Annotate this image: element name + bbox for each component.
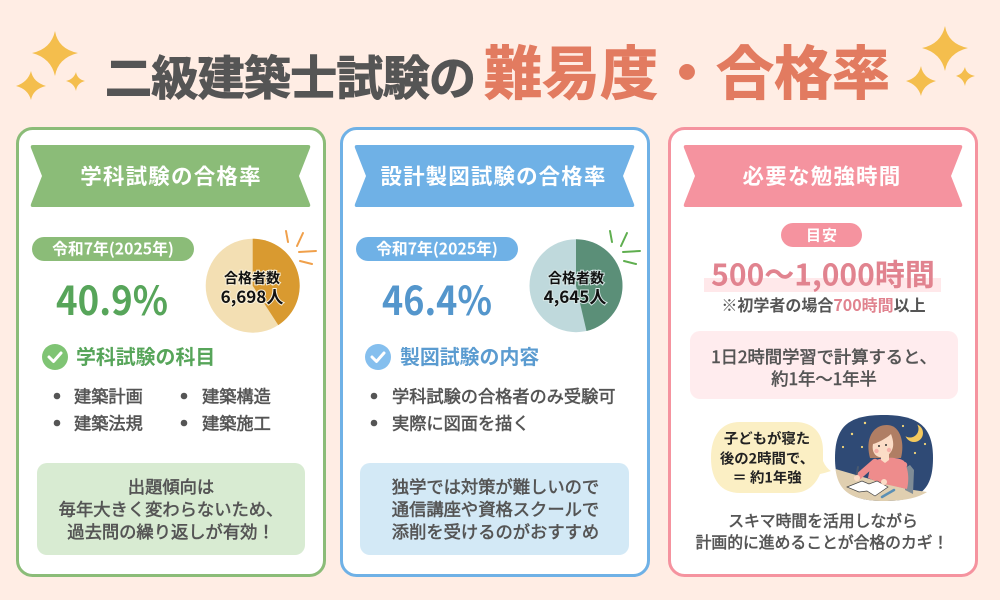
subheading with check: 学科試験の科目	[76, 341, 215, 370]
speech bubble: 子どもが寝た	[724, 428, 810, 448]
note box: 出題傾向は	[128, 473, 214, 498]
note box: 通信講座や資格スクールで	[392, 496, 599, 520]
note box: 添削を受けるのがおすすめ	[392, 518, 599, 543]
icon: sparkles right	[906, 26, 975, 96]
icon: burst lines	[610, 231, 640, 264]
closing message: 計画的に進めることが合格のカギ！	[696, 530, 948, 553]
closing message	[696, 508, 948, 553]
content list: 実際に図面を描く	[392, 410, 530, 434]
pie chart	[530, 239, 623, 332]
guide pill: 目安	[806, 224, 838, 246]
ribbon heading	[31, 145, 310, 207]
ribbon heading: 学科試験の合格率	[80, 160, 262, 191]
subject list: 建築計画	[74, 382, 143, 408]
note box: 独学では対策が難しいので	[392, 473, 599, 498]
speech bubble: ＝ 約1年強	[732, 466, 802, 488]
note box	[360, 463, 629, 555]
panel: written exam	[18, 128, 324, 576]
calculation box	[690, 331, 958, 399]
content list: 学科試験の合格者のみ受験可	[392, 382, 615, 408]
subject list: 建築法規	[74, 410, 143, 434]
speech bubble: 後の2時間で、	[720, 448, 814, 468]
pass rate: 46.4%	[382, 269, 492, 327]
ribbon heading: 必要な勉強時間	[743, 160, 901, 191]
subject list	[54, 382, 271, 434]
subheading with check: 製図試験の内容	[400, 341, 539, 370]
panel background	[18, 128, 324, 576]
pie chart: 合格者数	[548, 268, 604, 288]
icon: sparkles left	[16, 31, 85, 100]
guide pill	[781, 223, 862, 247]
title: 難易度・合格率	[484, 27, 890, 111]
hours: 500〜1,000時間	[711, 250, 935, 294]
year pill: 令和7年(2025年)	[52, 236, 174, 260]
pie chart: 6,698人	[221, 283, 283, 308]
calculation box: 約1年〜1年半	[771, 365, 877, 390]
pie chart	[206, 239, 300, 333]
beginner note: ※初学者の場合700時間以上	[721, 292, 926, 316]
note box: 過去問の繰り返しが有効！	[67, 518, 275, 543]
ribbon heading	[684, 145, 962, 207]
pass rate: 40.9%	[56, 269, 168, 327]
title	[105, 27, 890, 111]
title: 二級建築士試験の	[105, 40, 476, 109]
content list	[371, 382, 615, 434]
note box	[37, 463, 305, 555]
calculation box: 1日2時間学習で計算すると、	[711, 343, 937, 368]
note box: 毎年大きく変わらないため、	[59, 496, 283, 520]
ribbon heading	[355, 145, 634, 207]
pie chart: 4,645人	[544, 283, 606, 308]
closing message: スキマ時間を活用しながら	[728, 508, 918, 532]
illustration: studying at night	[835, 415, 933, 501]
subject list: 建築構造	[202, 382, 271, 408]
panel: study time	[670, 128, 976, 576]
panel: design exam	[342, 128, 648, 576]
icon: burst lines	[286, 231, 316, 264]
pie chart: 合格者数	[224, 268, 280, 288]
speech bubble	[711, 422, 831, 493]
subject list: 建築施工	[202, 410, 271, 434]
year pill: 令和7年(2025年)	[376, 236, 498, 260]
panel background	[342, 128, 648, 576]
panel background	[670, 128, 976, 576]
ribbon heading: 設計製図試験の合格率	[380, 160, 607, 191]
